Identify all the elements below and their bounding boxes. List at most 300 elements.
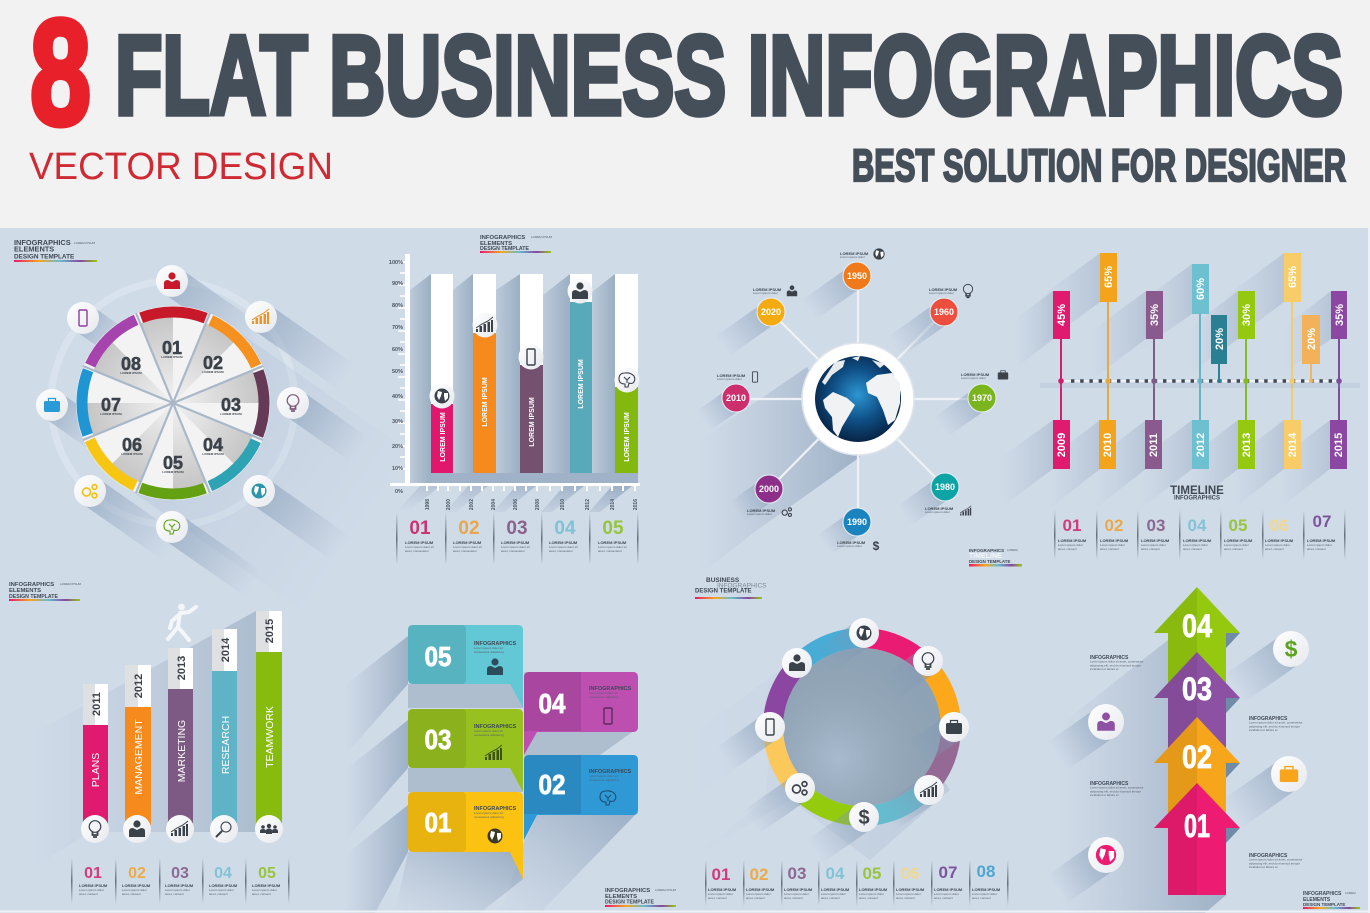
legend cards: amet, consect [896,896,915,900]
heading: ascending panel [9,582,82,601]
axis: 2008 [535,499,541,510]
legend cards: amet, consect [122,892,141,896]
heading: pie panel: INFOGRAPHICS [14,238,71,247]
heading: pie panel [14,238,97,262]
heading: arrows panel: INFOGRAPHICS [1303,891,1342,897]
timeline nodes: 1970 [972,393,992,403]
icon shadows [43,269,367,597]
legend cards: amet, consect [746,896,765,900]
year tags [1053,420,1347,469]
legend cards: Lorem ipsum dolor [1224,543,1249,547]
legend cards: LOREM IPSUM [708,887,737,892]
bubble 03: Lorem ipsum dolor sit [474,729,503,733]
legend cards: 01 [409,518,431,539]
year tags: 2014 [1287,432,1299,457]
pie numbers: LOREM IPSUM [121,452,143,456]
legend cards: LOREM IPSUM [122,883,151,888]
timeline nodes: 1990 [847,517,867,527]
legend cards: 02 [1105,516,1123,535]
step bars: 2013 [176,656,188,680]
percent tags: 20% [1306,328,1318,350]
legend cards: amet, consect [79,892,98,896]
heading: timeline [969,548,1022,566]
year tags: 2011 [1148,433,1160,457]
heading: ring panel: BUSINESS [706,577,740,584]
node captions: LOREM IPSUM [753,287,782,292]
legend cards: 04 [1188,516,1207,535]
node captions: $ [873,539,880,553]
bars: LOREM IPSUM [482,377,489,427]
legend cards: amet, consect [209,892,228,896]
bubble 05: consectetur adipiscing [474,650,504,654]
panel: stacked arrows [1047,587,1360,913]
legend cards: 01 [1063,516,1081,535]
legend cards: Lorem ipsum dolor [209,888,234,892]
legend cards: LOREM IPSUM [252,883,281,888]
legend cards: amet, consect [784,896,803,900]
panel: vertical timeline tags [1000,253,1360,560]
legend cards: 08 [977,862,995,881]
bubble 02: INFOGRAPHICS [589,769,632,775]
legend cards: LOREM IPSUM [972,887,1001,892]
arrow 01: 01 [1184,808,1210,844]
heading: bar panel: LOREM IPSUM [531,235,553,239]
legend cards: LOREM IPSUM [1058,538,1087,543]
axis: 2004 [491,499,497,510]
heading: bar panel: INFOGRAPHICS [480,235,525,241]
heading: timeline: DESIGN TEMPLATE [969,559,1010,564]
legend cards: 02 [750,865,768,884]
axis: 2014 [610,499,616,510]
legend cards: 05 [1229,516,1247,535]
dotted axis [1040,378,1360,388]
legend cards: 04 [554,518,576,539]
legend cards: 07 [939,863,957,882]
legend cards: 04 [826,864,845,883]
node captions: Lorem ipsum dolor [840,255,865,259]
arrow captions: adipiscing elit, sed do eiusmod tempor [1090,790,1141,794]
ring icon discs: $ [858,807,870,829]
bubble 03 [408,709,523,792]
panel: ring infographic [690,577,1008,906]
pie numbers: LOREM IPSUM [202,452,224,456]
node captions: LOREM IPSUM [961,372,990,377]
timeline nodes: 2010 [726,393,746,403]
pie numbers: 02 [203,353,223,373]
subtitle left: VECTOR DESIGN [29,146,333,188]
heading: pie panel: LOREM IPSUM [74,241,96,245]
step bars: 2014 [220,637,232,662]
node captions: Lorem ipsum dolor [747,512,772,516]
heading: bar panel: DESIGN TEMPLATE [480,246,529,252]
year tags: 2012 [1195,433,1207,457]
node captions: Lorem ipsum dolor [925,510,950,514]
bar shadows [396,274,638,512]
panel: bar chart [389,235,640,565]
arrow shadow [1060,640,1226,913]
heading: ring panel: DESIGN TEMPLATE [695,588,752,594]
legend cards: LOREM IPSUM [79,883,108,888]
pie icon discs [36,265,309,543]
year tags: 2010 [1102,433,1114,457]
heading: ascending panel: INFOGRAPHICS [9,582,54,588]
bars [431,274,638,473]
heading: bubble panel: INFOGRAPHICS [605,888,650,894]
legend cards: amet, consect [252,892,271,896]
pie numbers: 07 [101,395,121,415]
timeline heading: INFOGRAPHICS [1174,496,1220,502]
heading: arrows panel: ELEMENTS [1303,897,1331,903]
step bars: PLANS [90,753,102,787]
heading: ascending panel: LOREM IPSUM [60,582,82,586]
legend cards: amet, consect [1058,547,1077,551]
arrow 02: 02 [1182,739,1212,775]
bubble 05: Lorem ipsum dolor sit [474,646,503,650]
globe shadow [700,367,860,575]
step bars: 2012 [133,674,145,698]
heading: timeline: TIMELINE [969,553,1002,560]
pie numbers: 04 [203,435,223,455]
bubble 04: consectetur adipiscing [589,695,619,699]
arrow captions: INFOGRAPHICS [1090,781,1129,787]
legend cards: Lorem ipsum dolor [708,892,733,896]
bubble 04: Lorem ipsum dolor sit [589,691,618,695]
bubble 03: 03 [424,724,452,755]
legend cards: amet, consect [821,896,840,900]
bubble 02: Lorem ipsum dolor sit [589,774,618,778]
legend cards: Lorem ipsum dolor [896,892,921,896]
header band [0,0,1370,228]
axis: 60% [392,347,403,353]
axis: 0% [395,489,403,495]
legend cards: amet, consect [1307,547,1326,551]
legend cards: Lorem ipsum dolor [1183,543,1208,547]
legend cards: LOREM IPSUM [453,540,482,545]
node shadows [696,266,989,555]
panel: ascending bars [9,582,290,904]
bubble 02: 02 [538,769,566,800]
legend cards: Lorem ipsum dolor [79,888,104,892]
legend cards: LOREM IPSUM [165,883,194,888]
legend cards: LOREM IPSUM [934,887,963,892]
legend cards: LOREM IPSUM [1183,538,1212,543]
legend cards: 03 [171,865,189,882]
legend cards: amet, consectetur [549,549,573,553]
heading: bubble panel: DESIGN TEMPLATE [605,900,654,906]
legend cards: 06 [901,864,919,883]
axis: 1998 [425,499,431,510]
pie numbers: LOREM IPSUM [202,370,224,374]
node captions: Lorem ipsum dolor [837,544,862,548]
year tags: 2015 [1333,433,1345,457]
bars: LOREM IPSUM [578,359,585,409]
legend cards: amet, consectetur [501,549,525,553]
legend cards: amet, consect [1183,547,1202,551]
axis: 90% [392,281,403,287]
node captions: LOREM IPSUM [837,540,866,545]
legend cards: LOREM IPSUM [501,540,530,545]
legend cards: LOREM IPSUM [821,887,850,892]
heading: arrows panel [1303,891,1360,909]
heading: arrows panel: LOREM [1345,891,1356,895]
arrow captions: Lorem ipsum dolor sit amet, consectetur [1090,660,1143,664]
step bars: TEAMWORK [264,706,276,768]
percent tags [1053,253,1347,364]
legend cards: amet, consect [1100,547,1119,551]
percent tags: 60% [1195,278,1207,300]
arrow captions: incididunt ut labore et [1090,793,1119,797]
legend cards: LOREM IPSUM [859,887,888,892]
timeline nodes [722,262,996,536]
year tags: 2009 [1056,433,1068,457]
spokes [749,289,969,509]
legend cards [71,858,290,904]
heading: pie panel: ELEMENTS [14,244,54,254]
arrow captions: adipiscing elit, sed do eiusmod tempor [1090,664,1141,668]
arrow captions: INFOGRAPHICS [1249,716,1288,722]
node captions: LOREM IPSUM [840,251,869,256]
bubble 03: INFOGRAPHICS [474,724,516,730]
arrow captions [1090,655,1302,869]
legend cards: amet, consectetur [405,549,429,553]
year tags: 2013 [1241,433,1253,457]
heading: ring panel [695,577,767,599]
legend cards: Lorem ipsum dolor [784,892,809,896]
long shadow [30,611,256,870]
arrow captions: Lorem ipsum dolor sit amet, consectetur [1090,786,1143,790]
arrow captions: adipiscing elit, sed do eiusmod tempor [1249,724,1300,728]
arrow captions: INFOGRAPHICS [1090,655,1129,661]
pie numbers: 06 [122,435,142,455]
axis: 70% [392,325,403,331]
border strip [0,228,1370,913]
heading: ascending panel: DESIGN TEMPLATE [9,594,58,600]
legend cards: LOREM IPSUM [1307,538,1336,543]
axis [389,254,640,510]
node captions: LOREM IPSUM [717,373,746,378]
axis: 2016 [633,499,639,510]
heading: timeline: INFOGRAPHICS [969,548,1004,553]
legend cards: 05 [602,518,624,539]
bubble 04: INFOGRAPHICS [589,686,632,692]
node captions: Lorem ipsum dolor [961,376,986,380]
legend cards: LOREM IPSUM [209,883,238,888]
bubble 01 [408,792,523,879]
heading: bubble panel: ELEMENTS [605,894,637,900]
ring icon discs [755,618,969,832]
bar icon discs [430,278,640,408]
pie numbers: LOREM IPSUM [100,412,122,416]
pie chart wheel [52,282,294,524]
ring shadow [690,650,950,860]
axis: 20% [392,444,403,450]
arrow captions: incididunt ut labore et [1249,728,1278,732]
legend cards: LOREM IPSUM [784,887,813,892]
legend cards: amet, consectetur [453,549,477,553]
axis: 2010 [560,499,566,510]
legend cards: Lorem ipsum dolor [859,892,884,896]
globe [802,343,914,455]
bubble 01: 01 [424,807,452,838]
percent tags: 20% [1214,328,1226,350]
legend cards: 02 [128,865,146,882]
legend cards: LOREM IPSUM [549,540,578,545]
bar icon discs [81,815,283,843]
heading: arrows panel: DESIGN TEMPLATE [1303,902,1345,907]
heading: ring panel: INFOGRAPHICS [717,582,767,590]
legend cards: Lorem ipsum dolor [1265,543,1290,547]
bubble 05 [408,625,523,708]
legend cards [705,860,1008,906]
heading: bubble panel [605,888,677,907]
legend cards: Lorem ipsum dolor [1100,543,1125,547]
legend cards: LOREM IPSUM [1141,538,1170,543]
legend cards: 03 [506,518,528,539]
bubble 03: consectetur adipiscing [474,733,504,737]
bubble 01: Lorem ipsum dolor sit [474,811,503,815]
node captions: Lorem ipsum dolor [717,377,742,381]
legend cards: 04 [214,865,232,882]
axis: 2012 [585,499,591,510]
legend cards: 03 [788,864,806,883]
legend cards [1054,510,1346,560]
step bars: 2011 [91,692,103,716]
legend cards: amet, consect [1224,547,1243,551]
legend cards: amet, consect [1141,547,1160,551]
legend cards: Lorem ipsum dolor sit [405,545,434,549]
legend cards: Lorem ipsum dolor sit [598,545,627,549]
legend cards: Lorem ipsum dolor sit [549,545,578,549]
step bars: MARKETING [176,720,188,782]
percent tags: 65% [1287,266,1299,288]
bubble 01: INFOGRAPHICS [474,806,516,812]
legend cards: LOREM IPSUM [405,540,434,545]
pie numbers: LOREM IPSUM [120,371,142,375]
legend cards: Lorem ipsum dolor [122,888,147,892]
legend cards: 06 [1270,516,1288,535]
legend cards: 01 [84,865,102,882]
legend cards: LOREM IPSUM [746,887,775,892]
arrow captions: Lorem ipsum dolor sit amet, consectetur [1249,858,1302,862]
arrow captions: incididunt ut labore et [1090,667,1119,671]
runner figure [168,604,196,640]
step bars: 2015 [264,619,276,643]
arrow captions: Lorem ipsum dolor sit amet, consectetur [1249,720,1302,724]
arrow captions: INFOGRAPHICS [1249,853,1288,859]
legend cards: 01 [712,865,730,884]
node captions: LOREM IPSUM [929,287,958,292]
bubble shadows [345,636,638,913]
percent tags: 45% [1056,304,1068,326]
bubble 05: 05 [424,641,452,672]
panel: globe timeline [696,248,1022,575]
pie numbers: 08 [121,354,141,374]
legend cards: amet, consect [934,896,953,900]
legend cards: amet, consect [708,896,727,900]
stems [1061,302,1339,420]
legend cards: 05 [258,865,276,882]
ring [736,601,988,853]
arrow icon discs: $ [1285,636,1298,662]
legend cards: amet, consect [165,892,184,896]
arrow 04 [1154,587,1240,690]
axis: 10% [392,466,403,472]
legend cards: Lorem ipsum dolor sit [501,545,530,549]
legend cards: Lorem ipsum dolor sit [453,545,482,549]
legend cards: Lorem ipsum dolor [165,888,190,892]
heading: ascending panel: ELEMENTS [9,588,41,594]
bubble 04: 04 [538,688,566,719]
pie numbers [100,338,242,474]
legend cards: Lorem ipsum dolor [746,892,771,896]
arrow 03: 03 [1182,671,1212,707]
legend cards: 05 [863,864,881,883]
step bars: RESEARCH [220,716,232,774]
heading: bar panel: ELEMENTS [480,241,512,247]
node shadows [717,622,962,863]
arrow icon discs [1088,631,1309,873]
timeline nodes: 1960 [934,307,954,317]
legend cards: LOREM IPSUM [1224,538,1253,543]
pie numbers: LOREM IPSUM [161,355,183,359]
legend cards: 07 [1313,512,1331,531]
node captions: LOREM IPSUM [747,508,776,513]
heading: bubble panel: LOREM IPSUM [655,888,677,892]
panel: speech bubbles [345,625,677,913]
node captions [717,248,1008,553]
heading: pie panel: DESIGN TEMPLATE [14,254,75,260]
legend cards: Lorem ipsum dolor [1307,543,1332,547]
bubble 01: consectetur adipiscing [474,815,504,819]
legend cards: amet, consect [972,896,991,900]
arrow 02 [1154,717,1240,820]
disc shadows [1047,635,1301,903]
bars: LOREM IPSUM [529,397,536,447]
legend cards: amet, consectetur [598,549,622,553]
arrow 04: 04 [1182,608,1212,644]
bubble 04 [524,672,638,755]
legend cards: Lorem ipsum dolor [821,892,846,896]
arrow 03 [1154,652,1240,755]
panel: pie infographic [14,238,416,614]
axis: 2000 [446,499,452,510]
legend cards: amet, consect [859,896,878,900]
axis: 30% [392,419,403,425]
legend cards: Lorem ipsum dolor [252,888,277,892]
tag shadows [1000,253,1331,508]
legend cards: Lorem ipsum dolor [972,892,997,896]
bubble 05: INFOGRAPHICS [474,641,516,647]
legend cards: LOREM IPSUM [896,887,925,892]
legend cards: Lorem ipsum dolor [1141,543,1166,547]
axis: 100% [389,260,403,266]
pie numbers: 01 [162,338,182,358]
pie numbers: LOREM IPSUM [220,412,242,416]
pie numbers: LOREM IPSUM [162,470,184,474]
bars: LOREM IPSUM [440,412,447,462]
legend cards: LOREM IPSUM [1265,538,1294,543]
legend cards: 02 [458,518,480,539]
bubble 02: consectetur adipiscing [589,778,619,782]
pie numbers: 03 [221,395,241,415]
step bars [83,611,282,825]
legend cards [396,512,638,565]
arrow captions: incididunt ut labore et [1249,865,1278,869]
legend cards: Lorem ipsum dolor [1058,543,1083,547]
timeline heading: TIMELINE [1170,485,1224,497]
axis: 2006 [513,499,519,510]
arrow captions: adipiscing elit, sed do eiusmod tempor [1249,862,1300,866]
